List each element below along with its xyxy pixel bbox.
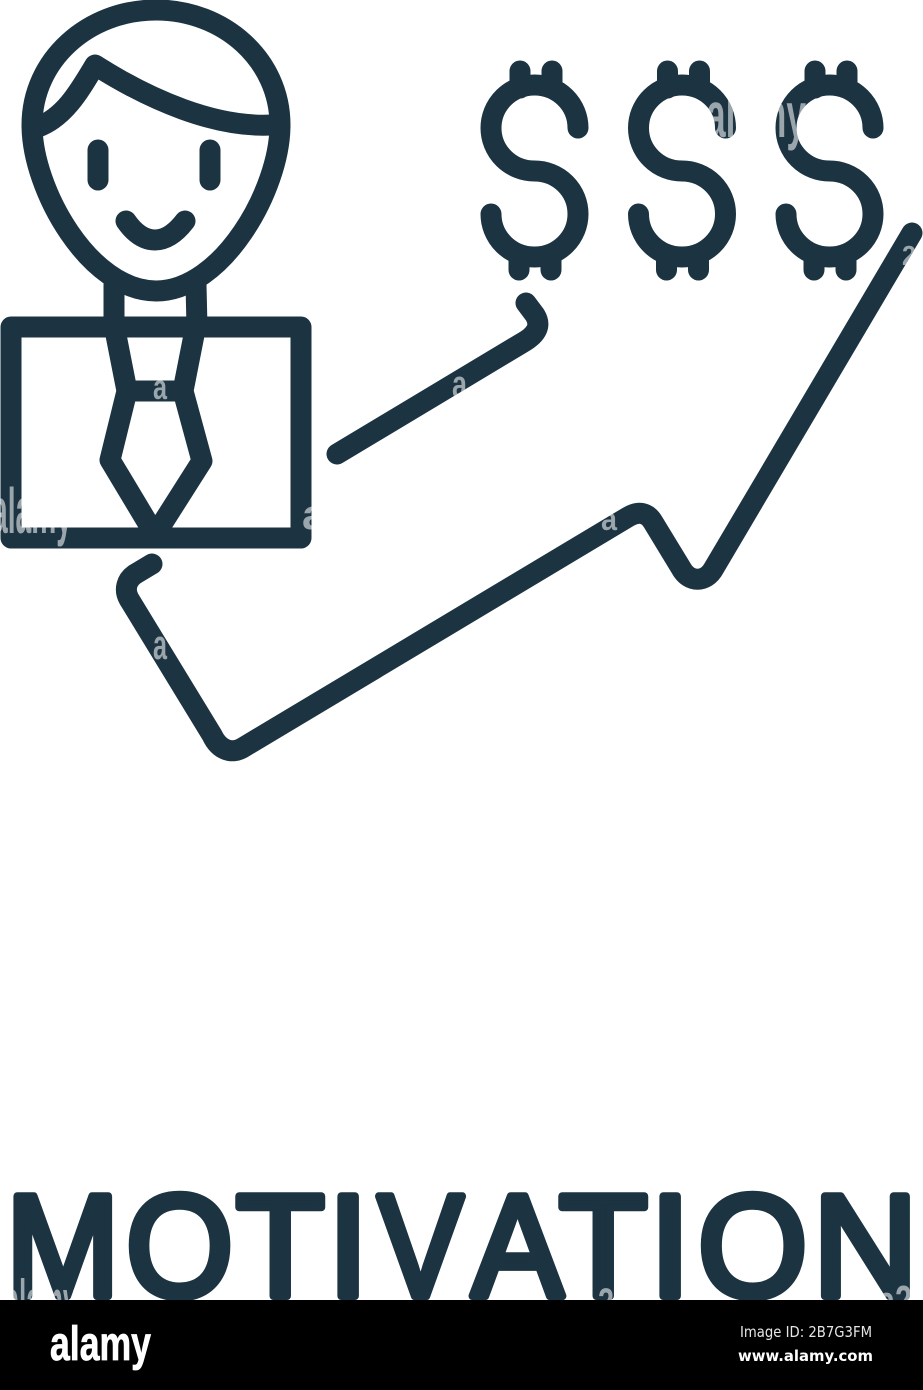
title	[6, 1164, 918, 1327]
watermark fragments: a	[302, 491, 327, 538]
arrow: rising growth line	[126, 233, 912, 751]
tie	[110, 330, 202, 535]
title: V	[378, 1164, 463, 1327]
watermark fragments: a	[452, 364, 468, 406]
icon: smiling businessman	[11, 10, 301, 538]
title: O	[126, 1165, 233, 1327]
watermark fragments: alamy	[5, 1268, 77, 1335]
arrow: pointer to dollars	[337, 303, 538, 454]
title: M	[6, 1165, 120, 1327]
icon: dollar signs	[491, 71, 873, 270]
smile	[126, 221, 185, 240]
alamy logo: alamy	[50, 1318, 151, 1371]
watermark fragments: alamy	[706, 79, 806, 151]
title: I	[650, 1165, 690, 1327]
title: I	[328, 1165, 368, 1327]
image id: Image ID: 2B7G3FM	[740, 1323, 872, 1341]
head outline	[32, 10, 280, 291]
right eye	[200, 150, 220, 180]
neck	[114, 285, 197, 327]
title: T	[559, 1165, 648, 1327]
dollar sign 2	[638, 71, 726, 270]
left eye	[88, 150, 108, 180]
title: A	[472, 1165, 563, 1327]
title: T	[236, 1165, 325, 1327]
title: O	[698, 1166, 807, 1327]
footer band	[0, 1300, 923, 1390]
dollar sign 1	[491, 71, 578, 270]
hair fringe	[38, 65, 272, 127]
website: www.alamy.com	[738, 1347, 873, 1365]
watermark fragments: a	[601, 501, 617, 537]
watermark fragments: 2	[902, 240, 916, 271]
body box	[11, 327, 301, 538]
title: N	[813, 1165, 918, 1327]
watermark fragments: a	[153, 621, 167, 668]
dollar sign 3	[786, 71, 873, 270]
watermark fragments: 2	[598, 1281, 614, 1325]
watermark fragments: a	[153, 368, 167, 407]
